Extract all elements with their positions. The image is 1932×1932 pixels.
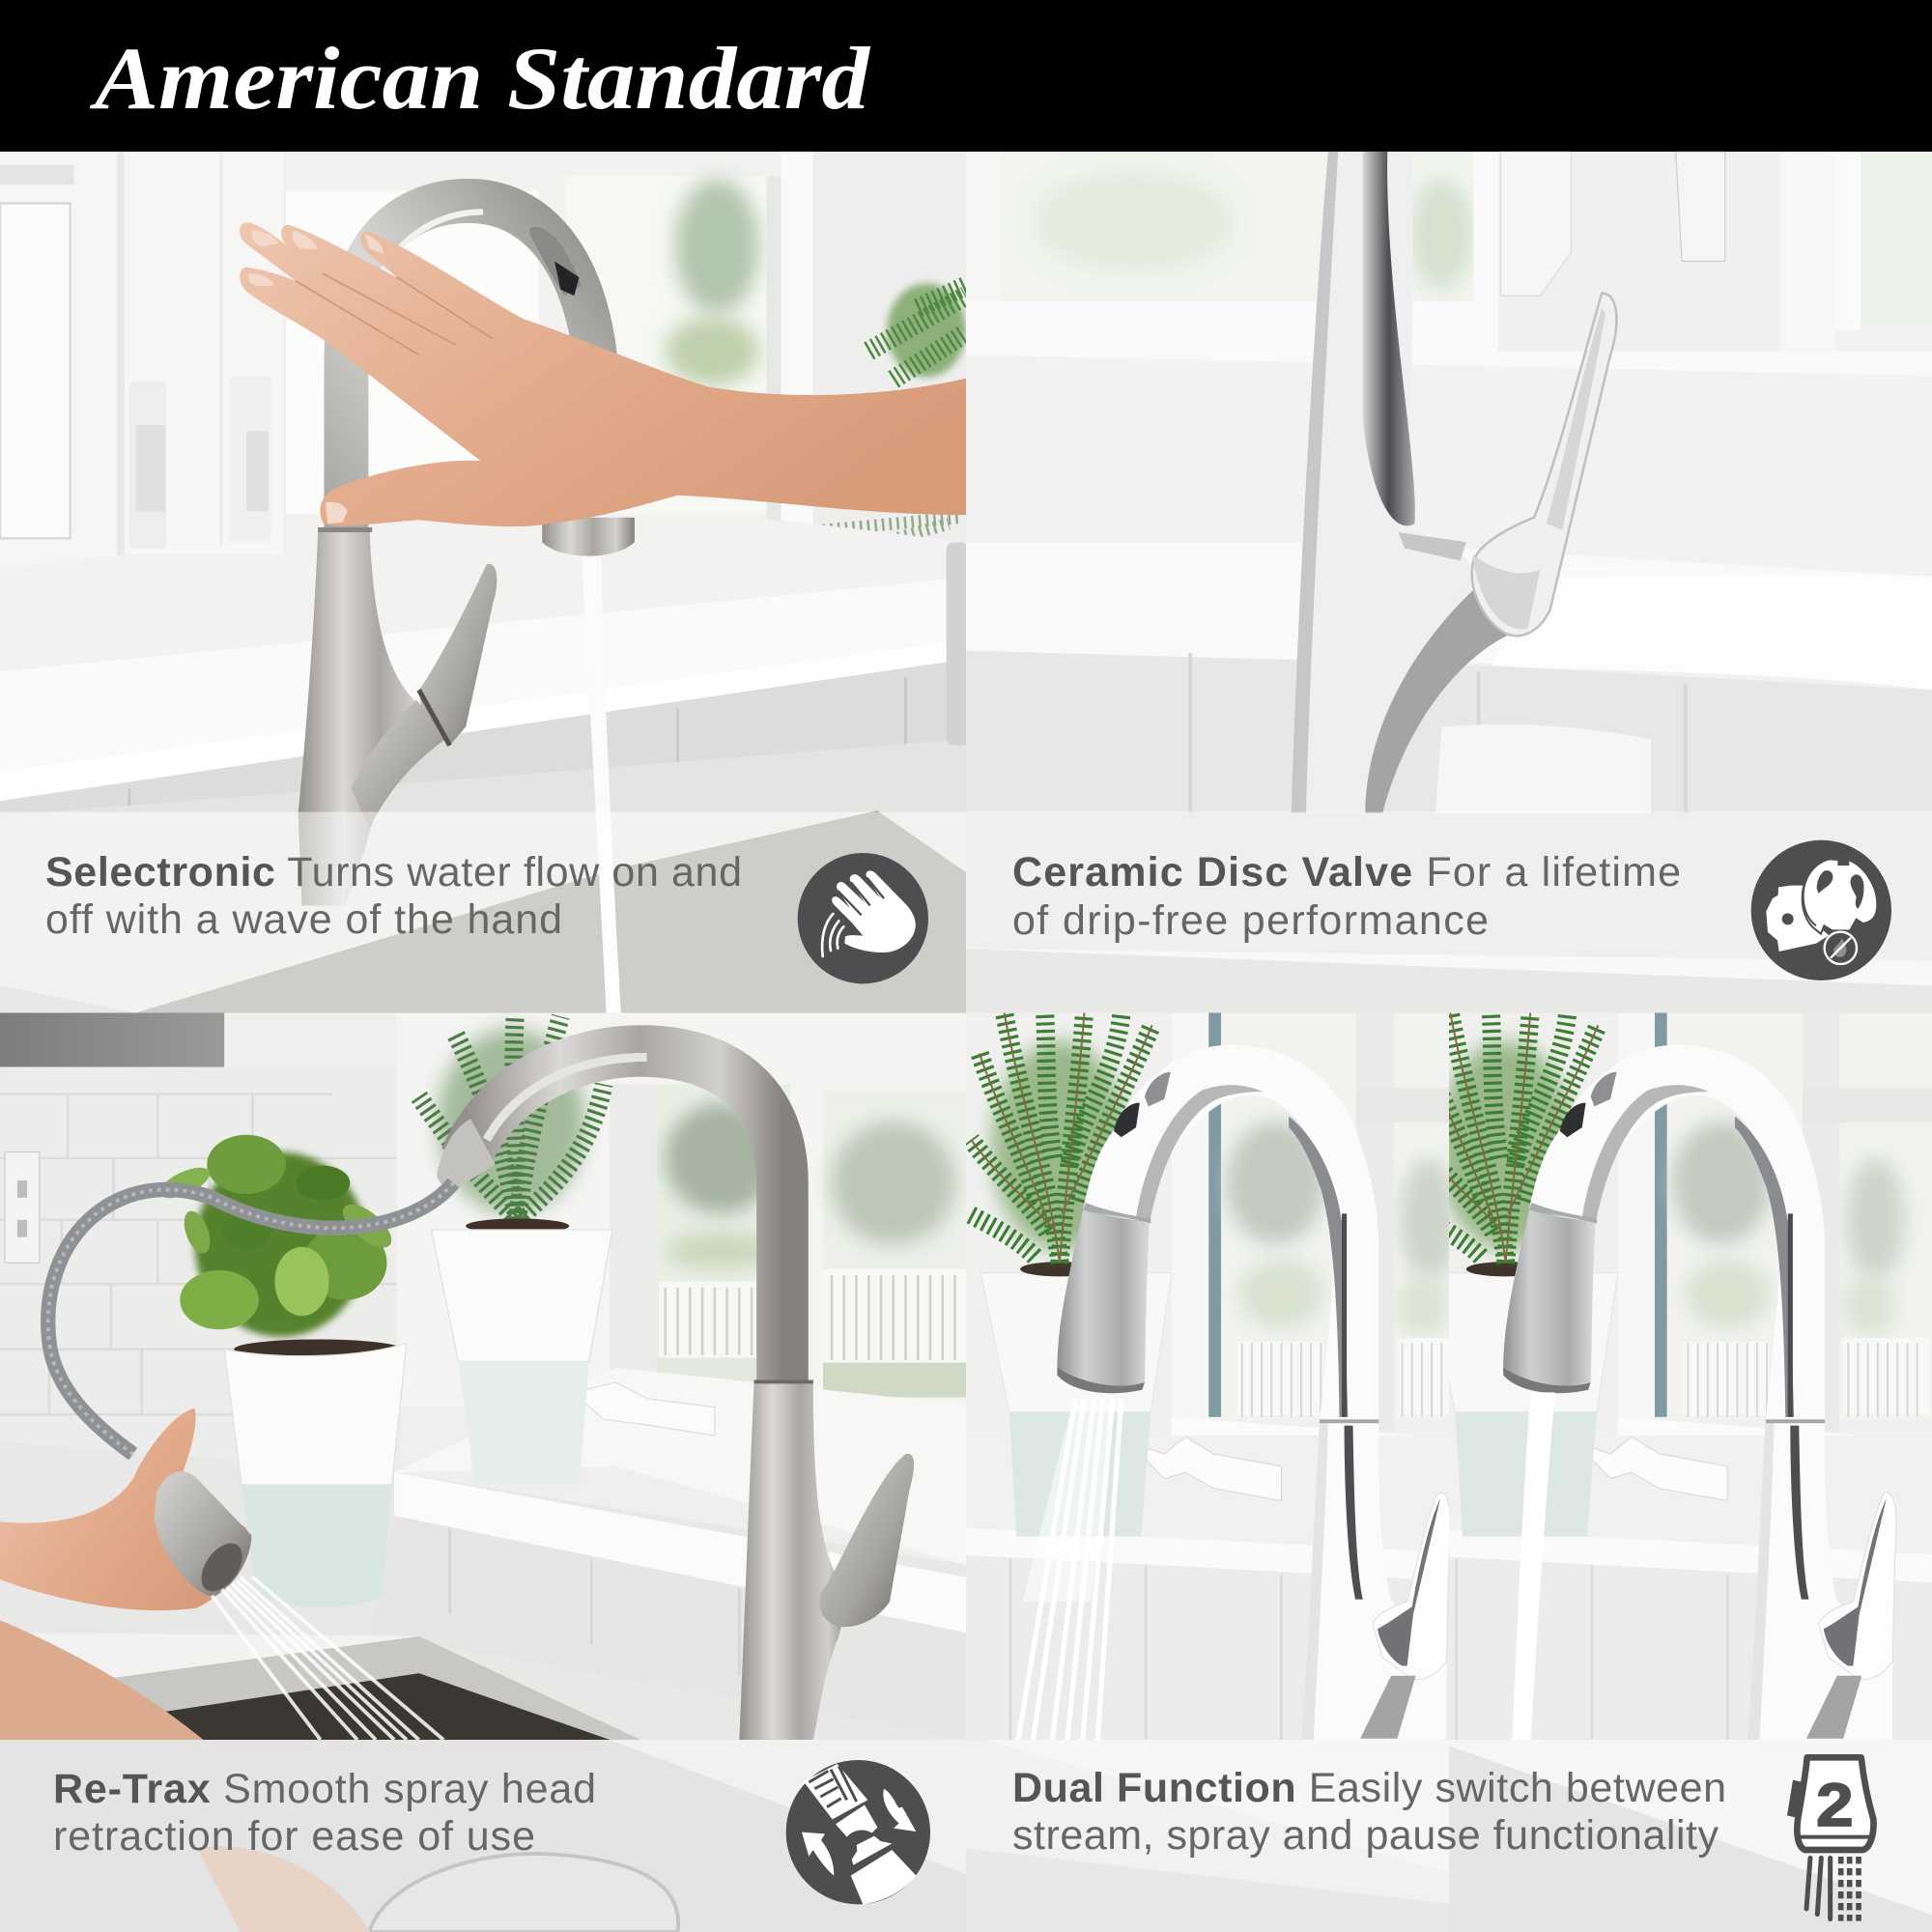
panel: selectronic photo [0,152,969,1012]
sink [135,810,966,1012]
icon: ceramic valve [1751,840,1891,980]
caption: re-trax: retraction for ease of use [53,1813,535,1860]
caption: ceramic disc valve [1012,849,1681,944]
caption: ceramic disc valve: of drip-free performance [1012,897,1489,944]
sink [157,1673,610,1740]
caption: dual function: stream, spray and pause functionality [1012,1812,1719,1859]
white pot short [224,1343,407,1485]
hand and spray head [0,1408,251,1740]
latch [573,1382,715,1435]
icon: dual function spray head [1787,1757,1874,1921]
chrome faucet [1292,152,1616,813]
faucet body [298,201,635,905]
handle [819,1454,914,1627]
caption: selectronic [45,849,742,943]
fern plant [822,277,966,537]
rosemary plant [419,1016,604,1234]
caption overlays [0,812,1932,1932]
window latches [129,376,271,549]
backsplash [0,1066,400,1416]
canister [947,542,966,746]
panel: dual function photo spray [966,1012,1449,1740]
window [396,1088,966,1397]
numeral: 2 [1816,1772,1854,1839]
window [966,151,1932,349]
hose [48,1182,453,1454]
steel faucet [437,1051,914,1740]
header band [0,0,1932,152]
panel: dual function photo stream [1412,1012,1932,1932]
lower counter shading under captions [0,1740,1932,1932]
hood [0,1012,224,1067]
icon: waving hand [798,853,928,983]
panel: ceramic disc photo [966,152,1932,1012]
caption: ceramic disc valve: Ceramic Disc Valve For a lifetime [1012,849,1681,895]
sill and ledge [118,520,923,558]
caption: selectronic: Selectronic Turns water flow on and [45,849,742,895]
sill and counter [394,1368,966,1565]
panel: re-trax photo [0,1012,966,1740]
window panes [0,152,966,582]
caption: dual function: Dual Function Easily switch between [1012,1765,1726,1811]
sill [966,301,1932,376]
hand [240,222,966,526]
caption: re-trax: Re-Trax Smooth spray head [53,1766,596,1812]
white pot tall [431,1230,612,1361]
basil plant [156,1135,402,1359]
caption: re-trax [53,1766,596,1860]
spray water [1016,1411,1122,1740]
caption: dual function [1012,1765,1726,1859]
icon: re-trax hose and arrows [786,1760,930,1904]
brand logo: American Standard [90,29,871,128]
stream water [1506,1392,1555,1932]
spray [212,1577,443,1740]
sensor [529,227,582,296]
water stream [582,557,621,1012]
caption: selectronic: off with a wave of the hand [45,896,562,943]
